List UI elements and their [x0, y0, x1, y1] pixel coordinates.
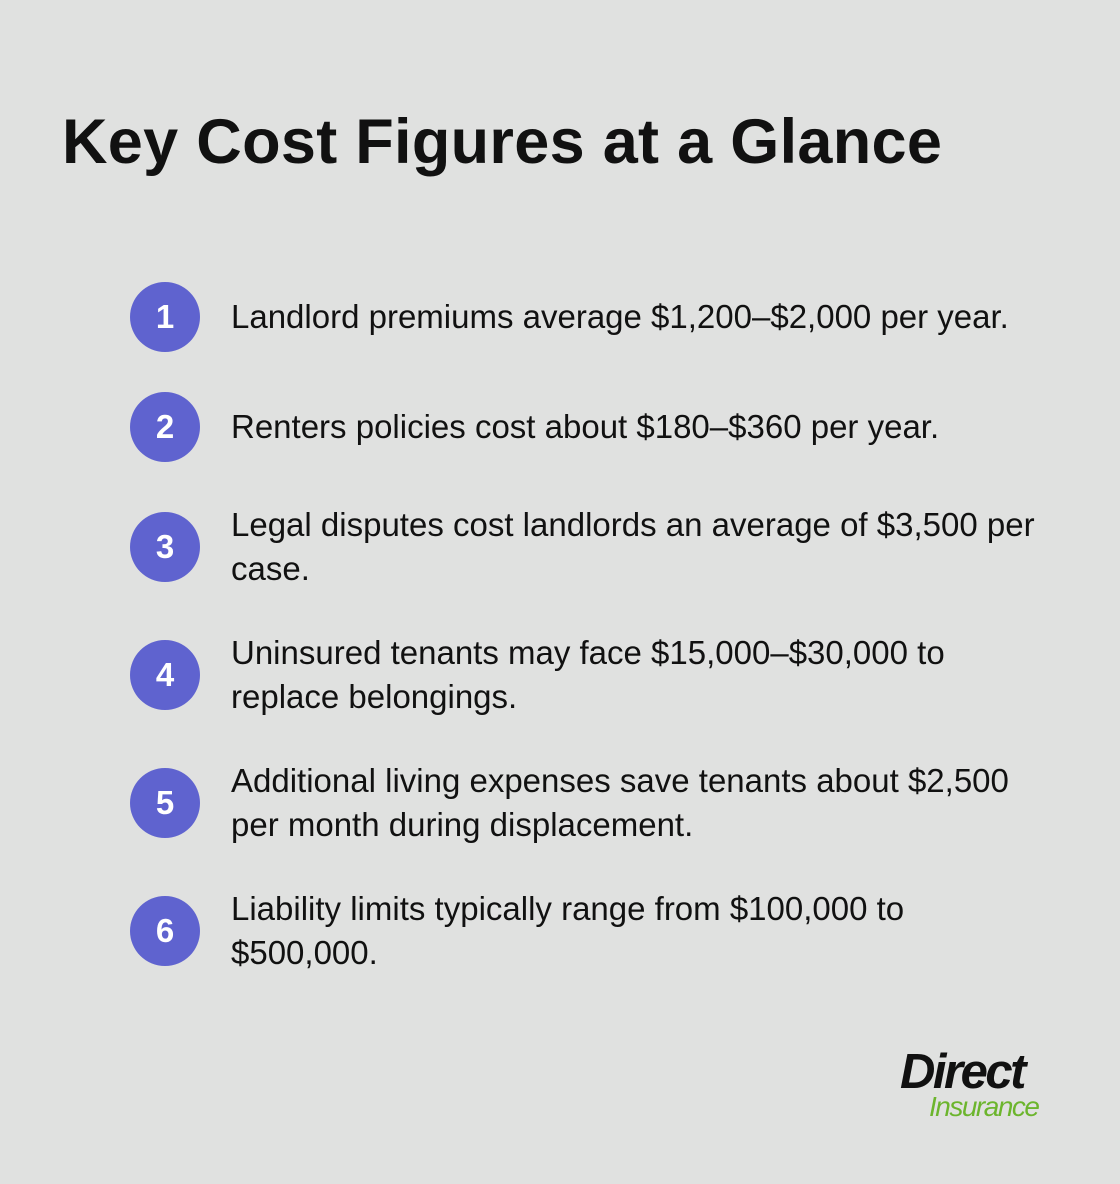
- badge 6: [130, 896, 200, 966]
- text 6: Liability limits typically range from $100,000 to: [231, 890, 904, 927]
- item 1: [130, 282, 1009, 352]
- item 5: [130, 762, 1009, 843]
- badge 3: [130, 512, 200, 582]
- text 5: per month during displacement.: [231, 806, 693, 843]
- badge 5: [130, 768, 200, 838]
- badge 6: 6: [156, 912, 174, 949]
- text 5: [231, 762, 1009, 843]
- title: Key Cost Figures at a Glance: [62, 107, 942, 177]
- logo: [900, 1045, 1039, 1122]
- item 6: [130, 890, 904, 971]
- badge 2: 2: [156, 408, 174, 445]
- badge 1: [130, 282, 200, 352]
- badge 4: 4: [156, 656, 174, 693]
- text 6: $500,000.: [231, 934, 378, 971]
- text 6: [231, 890, 904, 971]
- badge 1: 1: [156, 298, 174, 335]
- item 2: [130, 392, 939, 462]
- logo: Insurance: [929, 1091, 1038, 1122]
- text 4: replace belongings.: [231, 678, 517, 715]
- text 4: [231, 634, 945, 715]
- badge 4: [130, 640, 200, 710]
- item 4: [130, 634, 945, 715]
- text 2: Renters policies cost about $180–$360 per year.: [231, 408, 939, 445]
- logo: Direct: [900, 1045, 1024, 1099]
- item 3: [130, 506, 1035, 587]
- text 3: Legal disputes cost landlords an average of $3,500 per case.: [231, 506, 1035, 587]
- badge 2: [130, 392, 200, 462]
- text 4: Uninsured tenants may face $15,000–$30,000 to: [231, 634, 945, 671]
- badge 5: 5: [156, 784, 174, 821]
- text 5: Additional living expenses save tenants about $2,500: [231, 762, 1009, 799]
- text 1: Landlord premiums average $1,200–$2,000 per year.: [231, 298, 1009, 335]
- badge 3: 3: [156, 528, 174, 565]
